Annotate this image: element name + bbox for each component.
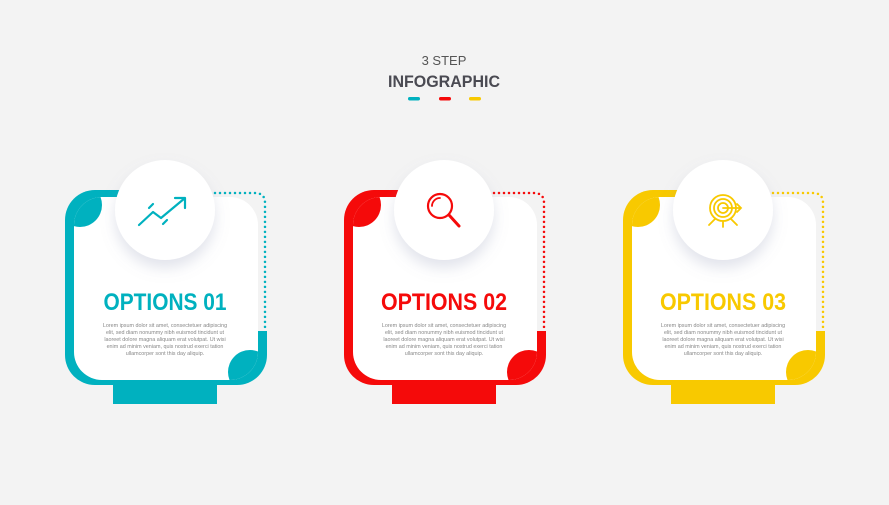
title [388, 53, 500, 100]
heading: OPTIONS 02: OPTIONS 02 [381, 289, 507, 316]
text block: ullamcorper sont this day aliquip. [684, 351, 762, 357]
text block: Lorem ipsum dolor sit amet, consectetuer adipiscing [661, 323, 785, 329]
text block: elit, sed diam nonummy nibh euismod tincidunt ut [106, 330, 225, 336]
title: INFOGRAPHIC [388, 72, 500, 91]
icon: magnifier [394, 160, 494, 260]
icon: target [673, 160, 773, 260]
text block: laoreet dolore magna aliquam erat volutpat. Ut wisi [662, 337, 784, 343]
text block: enim ad minim veniam, quis nostrud exerci tation [107, 344, 223, 350]
title: 3 STEP [422, 53, 466, 68]
text block: laoreet dolore magna aliquam erat volutpat. Ut wisi [104, 337, 226, 343]
text block: elit, sed diam nonummy nibh euismod tincidunt ut [664, 330, 783, 336]
text block [661, 323, 785, 357]
icon: trend arrow [115, 160, 215, 260]
heading: OPTIONS 01: OPTIONS 01 [104, 289, 226, 316]
text block: Lorem ipsum dolor sit amet, consectetuer adipiscing [103, 323, 227, 329]
text block: ullamcorper sont this day aliquip. [126, 351, 204, 357]
panel: options 02 [337, 160, 551, 404]
heading: OPTIONS 03: OPTIONS 03 [660, 289, 786, 316]
text block: laoreet dolore magna aliquam erat volutpat. Ut wisi [383, 337, 505, 343]
text block: elit, sed diam nonummy nibh euismod tincidunt ut [385, 330, 504, 336]
text block: enim ad minim veniam, quis nostrud exerci tation [386, 344, 502, 350]
text block: ullamcorper sont this day aliquip. [405, 351, 483, 357]
text block: Lorem ipsum dolor sit amet, consectetuer adipiscing [382, 323, 506, 329]
panel: options 03 [616, 160, 830, 404]
text block [103, 323, 227, 357]
text block [382, 323, 506, 357]
text block: enim ad minim veniam, quis nostrud exerci tation [665, 344, 781, 350]
panel: options 01 [58, 160, 272, 404]
